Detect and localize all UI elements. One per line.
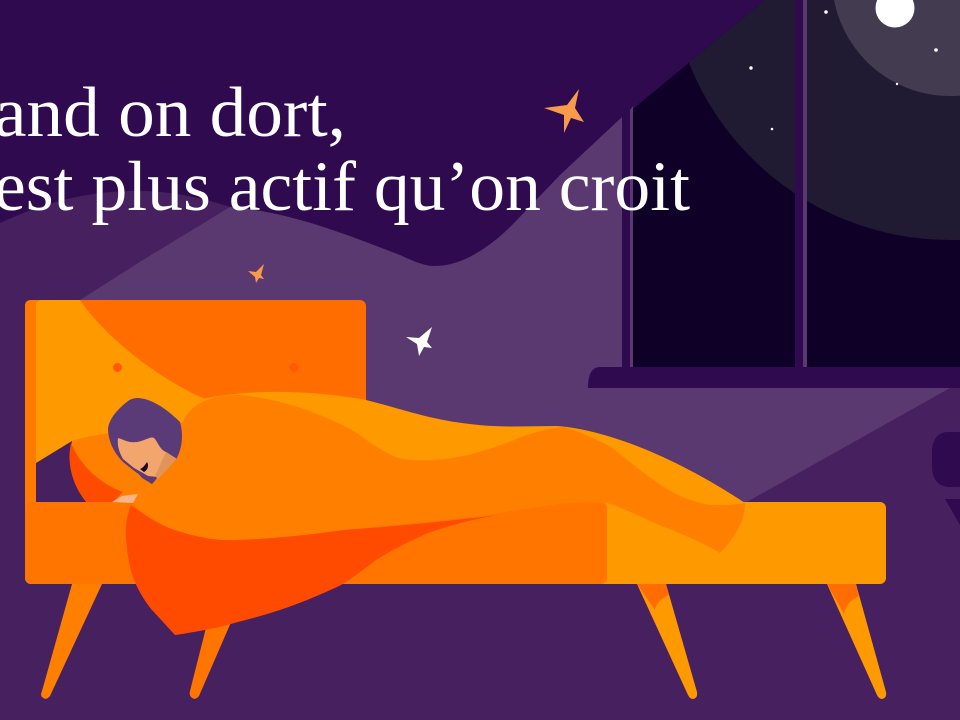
background: floor and far wave (0, 191, 960, 720)
stars in the window (749, 10, 938, 130)
title line 2: est plus actif qu’on croit (0, 148, 690, 226)
blanket light fold (200, 392, 745, 510)
shadow under pillow (36, 441, 90, 503)
blanket red underside (126, 505, 497, 635)
bed base right (25, 502, 886, 584)
neck shade (155, 452, 177, 479)
moon (876, 0, 914, 28)
moon halo inner (832, 0, 960, 96)
face (118, 438, 177, 479)
sparkle: white (406, 327, 432, 356)
title line 1: and on dort, (0, 74, 346, 152)
sparkle: small orange (248, 264, 264, 283)
bed leg rear (637, 584, 697, 699)
headboard button left (113, 363, 122, 372)
window (588, 0, 960, 388)
moon halo outer (669, 0, 960, 240)
headboard (25, 300, 366, 510)
background: lit wall (80, 117, 950, 520)
window frame centre (795, 0, 807, 370)
bed (25, 300, 886, 699)
beard line (134, 468, 158, 484)
bed leg front left (41, 584, 102, 699)
headboard button right (290, 363, 298, 372)
title (0, 74, 690, 226)
hand (112, 494, 138, 503)
hair (108, 398, 182, 484)
window glass (622, 0, 960, 370)
sparkle: large orange (544, 89, 584, 133)
pillow (71, 420, 200, 503)
blanket (126, 392, 745, 635)
mouth (140, 462, 148, 472)
pillow shade (69, 443, 123, 503)
cropped background glyph shape (932, 432, 960, 525)
window sill (588, 367, 960, 388)
blanket main fold (133, 395, 745, 553)
bed leg inner left (190, 620, 232, 699)
bed base left (25, 502, 607, 584)
sleeper (108, 398, 182, 503)
bed leg right (827, 584, 886, 699)
window frame left (622, 106, 633, 370)
headboard lit area (36, 300, 205, 510)
headboard left edge (25, 300, 38, 510)
